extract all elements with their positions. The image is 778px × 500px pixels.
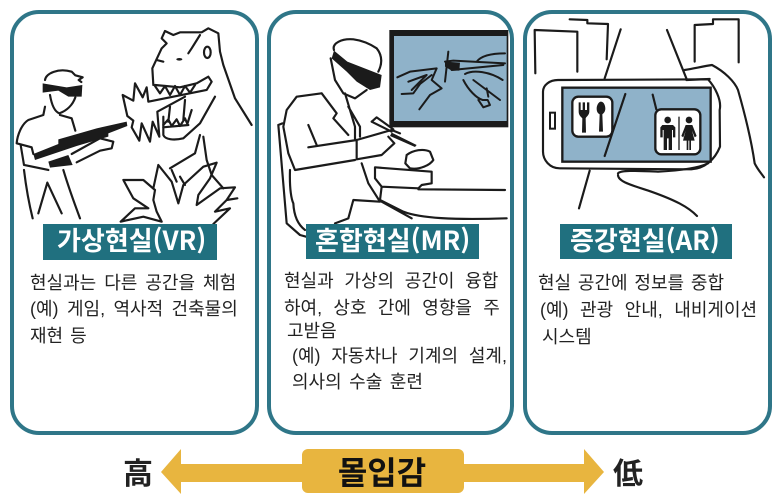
text block: MR description	[284, 271, 507, 392]
text block: MR description: 고받음	[287, 321, 337, 341]
text block: VR description: (예) 게임, 역사적 건축물의	[30, 299, 238, 319]
text block: MR description: 의사의 수술 훈련	[292, 372, 423, 392]
arrow: immersion scale	[161, 449, 604, 494]
text block: AR description: (예) 관광 안내, 내비게이션	[540, 300, 757, 320]
illustration: person with VR headset shooting at a dinosaur	[17, 28, 252, 224]
panel: VR	[12, 12, 257, 433]
heading: MR: 혼합현실(MR)	[315, 221, 470, 258]
label: low: 低	[613, 458, 643, 491]
heading: immersion: 몰입감	[338, 455, 426, 491]
text block: VR description: 재현 등	[30, 326, 87, 346]
text block: AR description	[538, 273, 757, 347]
text block: VR description: 현실과는 다른 공간을 체험	[30, 273, 236, 293]
label: high: 高	[123, 458, 153, 491]
illustration: smartphone with AR icons	[535, 19, 764, 216]
illustration: surgeon training with headset and on-screen surgery	[278, 30, 508, 237]
text block: MR description: 하여, 상호 간에 영향을 주	[284, 298, 500, 318]
text block: MR description: (예) 자동차나 기계의 설계,	[292, 346, 507, 366]
icon: restroom	[655, 109, 700, 154]
text block: VR description	[30, 273, 238, 346]
panel: MR	[269, 12, 512, 433]
icon: restaurant	[572, 97, 612, 137]
text block: MR description: 현실과 가상의 공간이 융합	[284, 271, 498, 291]
panel: AR	[525, 12, 770, 433]
text block: AR description: 현실 공간에 정보를 중합	[538, 273, 724, 293]
heading: AR: 증강현실(AR)	[570, 221, 720, 258]
heading: VR: 가상현실(VR)	[57, 221, 206, 258]
text block: AR description: 시스템	[542, 327, 592, 347]
